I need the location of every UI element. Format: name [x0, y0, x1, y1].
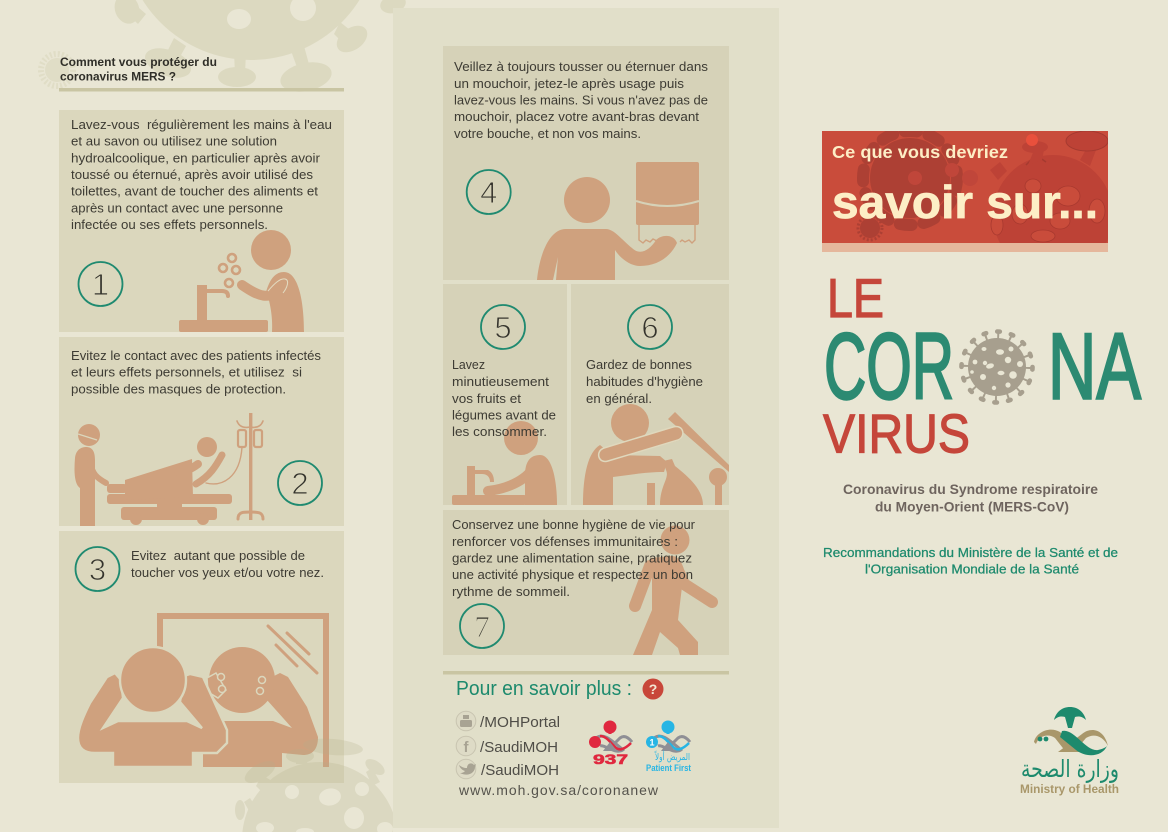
- recommendations text: l'Organisation Mondiale de la Santé: [865, 562, 1079, 576]
- instruction text 3: Evitez autant que possible de: [131, 549, 305, 563]
- instruction text 6: Gardez de bonnes: [586, 358, 692, 372]
- panel 3: do not touch eyes and nose: [59, 531, 398, 832]
- instruction text 5: Lavez: [452, 358, 485, 372]
- number 1: [78, 262, 122, 306]
- background virus top: [111, 0, 408, 96]
- number 6: [628, 305, 672, 349]
- instruction text 3: toucher vos yeux et/ou votre nez.: [131, 566, 324, 580]
- icon: twitter: [456, 759, 476, 779]
- number 5: 5: [494, 310, 512, 345]
- footer heading: pour en savoir plus: Pour en savoir plus :: [456, 678, 632, 700]
- number 2: 2: [291, 466, 309, 501]
- subtitle: Coronavirus du Syndrome respiratoire: [843, 482, 1099, 497]
- number 4: 4: [480, 175, 497, 210]
- instruction text 4: Veillez à toujours tousser ou éternuer dans: [454, 60, 708, 74]
- instruction text 1: [71, 118, 332, 232]
- logo: ministry of health: [1020, 707, 1119, 796]
- logo: patient first: 1: [649, 738, 655, 748]
- instruction text 4: un mouchoir, jetez-le après usage puis: [454, 77, 684, 91]
- banner: ce que vous devriez savoir sur: Ce que vous devriez: [832, 142, 1008, 162]
- title: le coronavirus: COR: [824, 314, 954, 418]
- recommendations text: Recommandations du Ministère de la Santé et de: [823, 546, 1118, 560]
- instruction text 6: habitudes d'hygiène: [586, 375, 703, 389]
- background virus bottom: [235, 736, 398, 832]
- website url: www.moh.gov.sa/coronanew: [458, 782, 659, 798]
- instruction text 5: minutieusement: [452, 375, 550, 389]
- instruction text 1: Lavez-vous régulièrement les mains à l'eau: [71, 118, 332, 132]
- instruction text 4: [454, 60, 708, 141]
- icon: person with waste bag: [583, 404, 729, 505]
- panel 4: cough in tissue: [443, 46, 729, 280]
- panel 7: healthy lifestyle: [443, 510, 729, 655]
- instruction text 2: Evitez le contact avec des patients infectés: [71, 349, 321, 363]
- subtitle: du Moyen-Orient (MERS-CoV): [875, 500, 1069, 514]
- icon: person at mirror touching face: [78, 613, 329, 767]
- number 3: 3: [89, 552, 106, 587]
- logo: ministry of health: Ministry of Health: [1020, 782, 1119, 796]
- number 1: 1: [92, 267, 109, 302]
- instruction text 1: toussé ou éternué, après avoir utilisé des: [71, 168, 313, 182]
- number 7: 7: [474, 609, 490, 644]
- header: comment vous protéger: [41, 54, 344, 92]
- banner: ce que vous devriez savoir sur: savoir sur...: [832, 176, 1098, 228]
- logo: ministry of health: وزارة الصحة: [1021, 755, 1119, 783]
- logo: patient first: [646, 720, 691, 773]
- number 5: [481, 305, 525, 349]
- recommendations text: [823, 546, 1118, 576]
- instruction text 5: les consommer.: [452, 425, 547, 439]
- icon: youtube: [456, 711, 476, 731]
- instruction text 7: gardez une alimentation saine, pratiquez: [452, 552, 692, 566]
- instruction text 7: Conservez une bonne hygiène de vie pour: [452, 518, 695, 532]
- social links: /MOHPortal: [480, 715, 560, 731]
- panel 2: avoid contact: [59, 337, 344, 526]
- instruction text 1: et au savon ou utilisez une solution: [71, 135, 277, 149]
- title: le coronavirus: [823, 267, 1141, 464]
- banner: ce que vous devriez savoir sur: [822, 131, 1108, 252]
- instruction text 1: après un contact avec une personne: [71, 201, 283, 215]
- subtitle: [843, 482, 1099, 514]
- instruction text 1: toilettes, avant de toucher des aliments et: [71, 185, 319, 199]
- footer heading: pour en savoir plus: ?: [649, 681, 657, 697]
- instruction text 5: [452, 358, 556, 439]
- icon: walking person: [633, 526, 712, 655]
- instruction text 6: [586, 358, 703, 406]
- instruction text 4: mouchoir, placez votre avant-bras devant: [454, 110, 700, 124]
- footer divider: [443, 671, 729, 674]
- panel 5: wash fruits and vegetables: [443, 284, 567, 505]
- logo: 937: [589, 720, 632, 767]
- icon: virus as letter O: [962, 332, 1032, 402]
- instruction text 1: hydroalcoolique, en particulier après avoir: [71, 151, 320, 165]
- title: le coronavirus: VIRUS: [823, 402, 970, 464]
- number 6: 6: [641, 310, 659, 345]
- instruction text 3: [131, 549, 324, 580]
- instruction text 4: lavez-vous les mains. Si vous n'avez pas de: [454, 94, 708, 108]
- panel 1: washing hands: [59, 110, 344, 332]
- icon: facebook: [456, 736, 476, 756]
- instruction text 5: vos fruits et: [452, 392, 522, 406]
- icon: person washing hands: [179, 230, 304, 332]
- instruction text 2: et leurs effets personnels, et utilisez si: [71, 366, 302, 380]
- instruction text 7: une activité physique et respectez un bon: [452, 568, 693, 582]
- instruction text 4: votre bouche, et non vos mains.: [454, 127, 641, 141]
- instruction text 5: légumes avant de: [452, 408, 556, 422]
- number 3: [76, 547, 120, 591]
- header: comment vous protéger: Comment vous protéger du: [60, 57, 217, 69]
- icon: person using tissue dispenser: [537, 162, 699, 280]
- social links: [456, 711, 659, 798]
- panel 6: good hygiene habits: [571, 284, 729, 505]
- title: le coronavirus: LE: [827, 267, 884, 329]
- social links: /SaudiMOH: [480, 740, 558, 756]
- instruction text 7: rythme de sommeil.: [452, 585, 570, 599]
- logo: 937: 937: [593, 751, 628, 767]
- instruction text 2: possible des masques de protection.: [71, 382, 286, 396]
- instruction text 1: infectée ou ses effets personnels.: [71, 218, 268, 232]
- number 4: [467, 170, 511, 214]
- middle column background: [393, 8, 779, 828]
- instruction text 6: en général.: [586, 392, 652, 406]
- logo: patient first: Patient First: [646, 763, 691, 773]
- instruction text 2: [71, 349, 321, 396]
- social links: /SaudiMOH: [481, 763, 559, 779]
- header: comment vous protéger: coronavirus MERS ?: [60, 72, 176, 84]
- icon: facebook: f: [464, 739, 470, 756]
- instruction text 7: renforcer vos défenses immunitaires :: [452, 535, 678, 549]
- icon: person washing food: [452, 421, 557, 505]
- instruction text 7: [452, 518, 695, 599]
- number 7: [460, 604, 504, 648]
- logo: patient first: المريض أولاً: [654, 750, 690, 763]
- banner virus decoration: [856, 131, 1108, 243]
- icon: patient in bed with caregiver: [75, 413, 263, 526]
- number 2: [278, 461, 322, 505]
